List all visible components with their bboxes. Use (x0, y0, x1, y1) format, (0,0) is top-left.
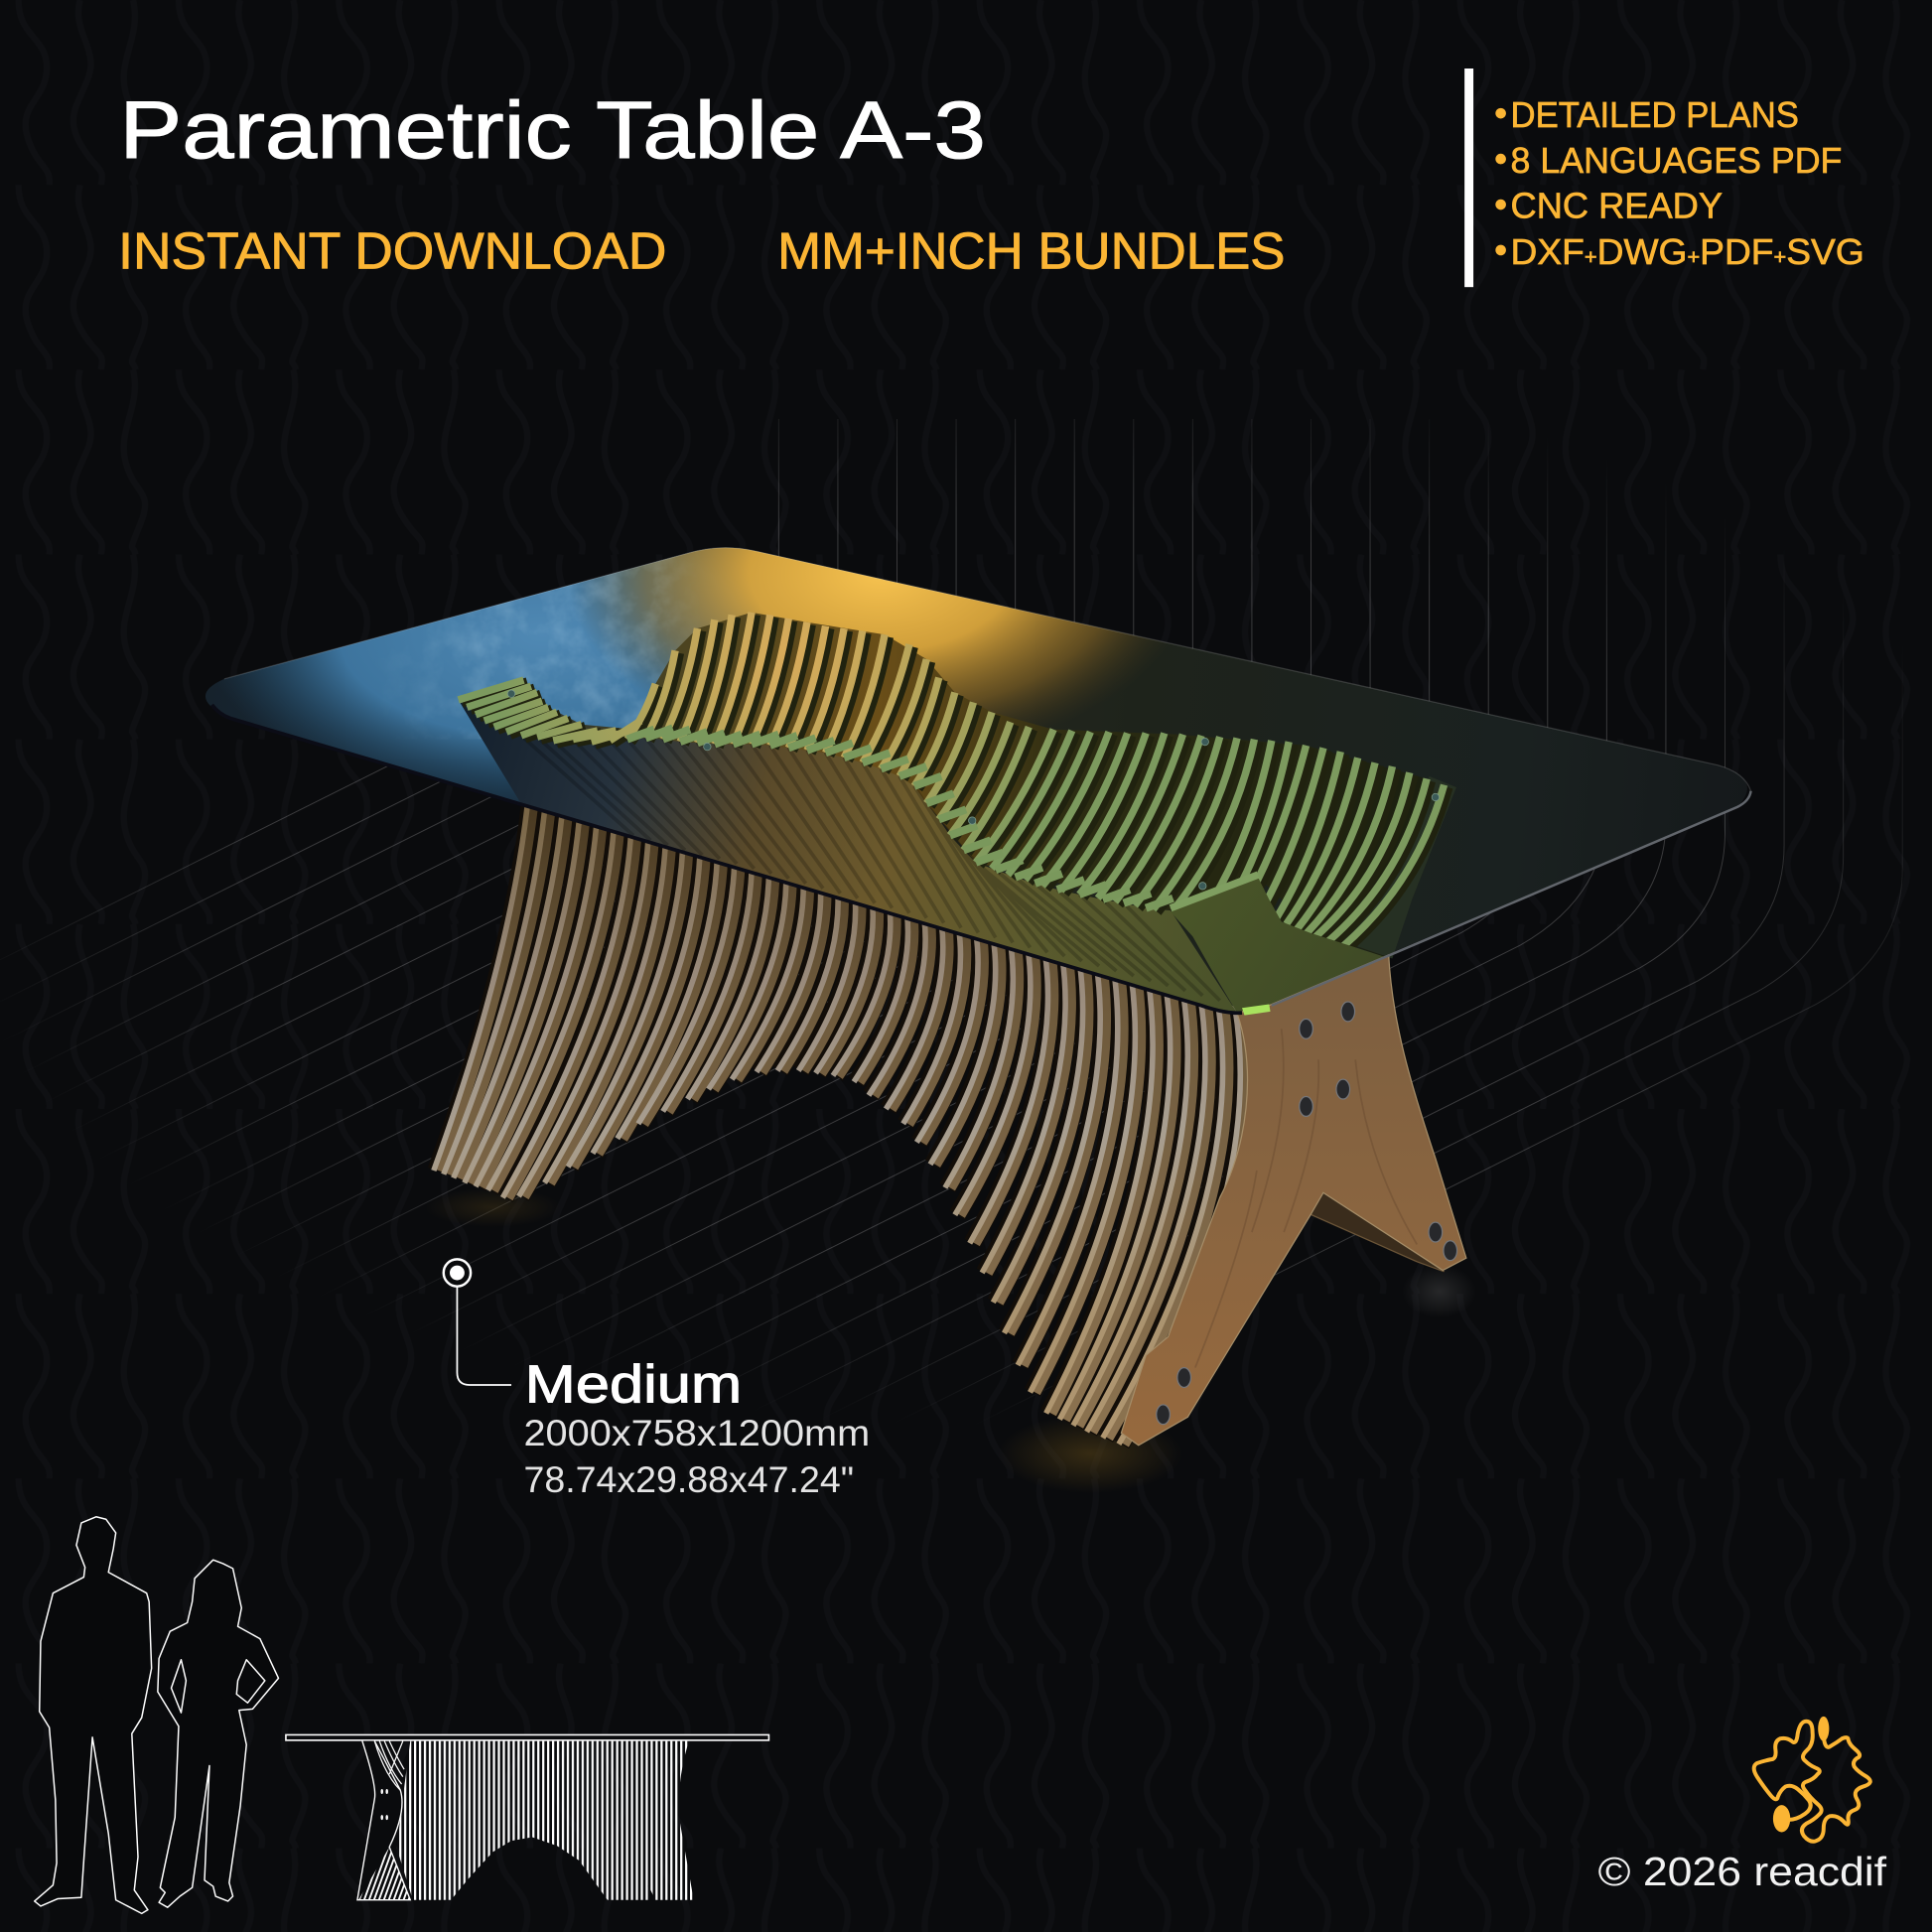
copyright: © 2026 reacdif (1598, 1849, 1887, 1894)
dark slat underlay (459, 613, 1456, 959)
elevation upper cross lines (374, 1741, 404, 1790)
silhouette: woman (158, 1560, 278, 1907)
far end plate (1320, 776, 1456, 959)
elevation bolts (380, 1789, 388, 1820)
feature list (1496, 94, 1864, 272)
glass back edge (224, 548, 1751, 791)
feature list: DETAILED PLANS (1511, 94, 1799, 135)
inch dimensions: 78.74x29.88x47.24" (523, 1458, 854, 1500)
callout: medium size (444, 1259, 870, 1500)
feature list: 8 LANGUAGES PDF (1511, 140, 1842, 181)
elevation cross stripes (358, 1847, 410, 1900)
wood grain (1195, 1029, 1417, 1368)
glass tabletop (206, 548, 1747, 1012)
glass front edge dark (211, 705, 1242, 1013)
parametric table illustration (206, 547, 1752, 1449)
green top slats (459, 613, 1448, 949)
neon corner marker (1242, 1004, 1271, 1016)
feature list: DXF+DWG+PDF+SVG (1511, 231, 1864, 272)
callout leader line (457, 1287, 511, 1385)
green plate top edge (1171, 875, 1258, 908)
stepped near-edge slat tips (627, 728, 1173, 908)
glass colour glows (231, 548, 1154, 796)
subheading: instant download: INSTANT DOWNLOAD (118, 223, 666, 281)
table side elevation drawing (286, 1734, 768, 1900)
hardware dots on green structure (507, 690, 1440, 890)
glass texture (422, 558, 677, 739)
floor glow under table legs (425, 1187, 1476, 1493)
glass right edge light (1272, 791, 1751, 1006)
leg bolts (1157, 1002, 1457, 1425)
front face of ribs above glass edge (459, 700, 1237, 1013)
wooden end plate leg (1121, 955, 1466, 1446)
feature list: CNC READY (1511, 186, 1723, 226)
callout heading: Medium (525, 1355, 742, 1414)
wooden lower ribs (434, 806, 1245, 1445)
front rib grooves (521, 736, 1220, 1001)
title: Parametric Table A-3 (119, 85, 986, 176)
millimetre dimensions: 2000x758x1200mm (523, 1412, 870, 1453)
subheading: bundles: MM+INCH BUNDLES (777, 223, 1285, 281)
elevation end plate (357, 1741, 410, 1900)
silhouette: man (35, 1517, 152, 1913)
logo (1754, 1717, 1870, 1842)
elevation tabletop (286, 1734, 768, 1740)
elevation ribs (397, 1741, 694, 1900)
rear leg stack (1307, 1190, 1445, 1272)
green end plate (1171, 878, 1390, 1013)
vertical divider (1464, 69, 1473, 287)
callout marker (444, 1259, 471, 1287)
perspective floor and wall lines (16, 419, 1902, 1398)
